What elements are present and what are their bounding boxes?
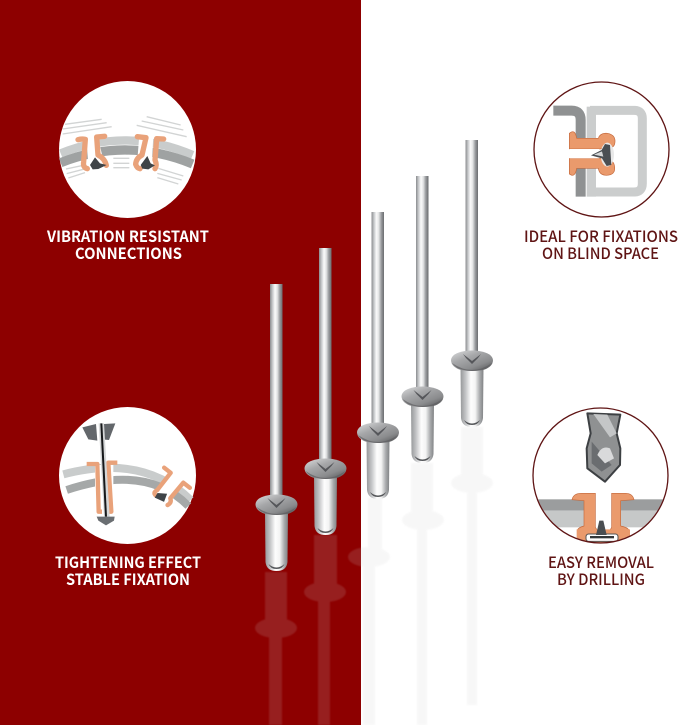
icon: vibration resistant connections bbox=[59, 81, 196, 218]
panel: tightening effect bbox=[55, 407, 201, 590]
rivet reflections bbox=[255, 427, 493, 725]
rivet 3 bbox=[357, 212, 399, 499]
caption: BY DRILLING bbox=[557, 568, 645, 590]
rivet 1 bbox=[256, 284, 298, 571]
caption: ON BLIND SPACE bbox=[542, 242, 659, 264]
icon: easy removal by drilling bbox=[530, 408, 669, 547]
rivet 2 bbox=[304, 248, 346, 535]
caption: CONNECTIONS bbox=[75, 242, 182, 264]
panel: blind space bbox=[524, 82, 678, 264]
caption: VIBRATION RESISTANT bbox=[46, 225, 209, 247]
caption bbox=[524, 225, 678, 264]
rivet 5 bbox=[451, 140, 493, 427]
panel: easy removal bbox=[530, 408, 669, 590]
red background panel bbox=[0, 0, 361, 725]
caption bbox=[548, 551, 654, 590]
rivets bbox=[256, 140, 493, 571]
caption bbox=[55, 551, 201, 590]
caption: TIGHTENING EFFECT bbox=[55, 551, 201, 573]
caption: IDEAL FOR FIXATIONS bbox=[524, 225, 678, 247]
caption: EASY REMOVAL bbox=[548, 551, 654, 573]
caption bbox=[46, 225, 209, 264]
icon: blind space fixation bbox=[534, 82, 669, 217]
rivet 4 bbox=[402, 176, 444, 463]
icon: tightening effect bbox=[59, 407, 196, 544]
caption: STABLE FIXATION bbox=[66, 568, 190, 590]
panel: vibration resistant bbox=[46, 81, 209, 264]
